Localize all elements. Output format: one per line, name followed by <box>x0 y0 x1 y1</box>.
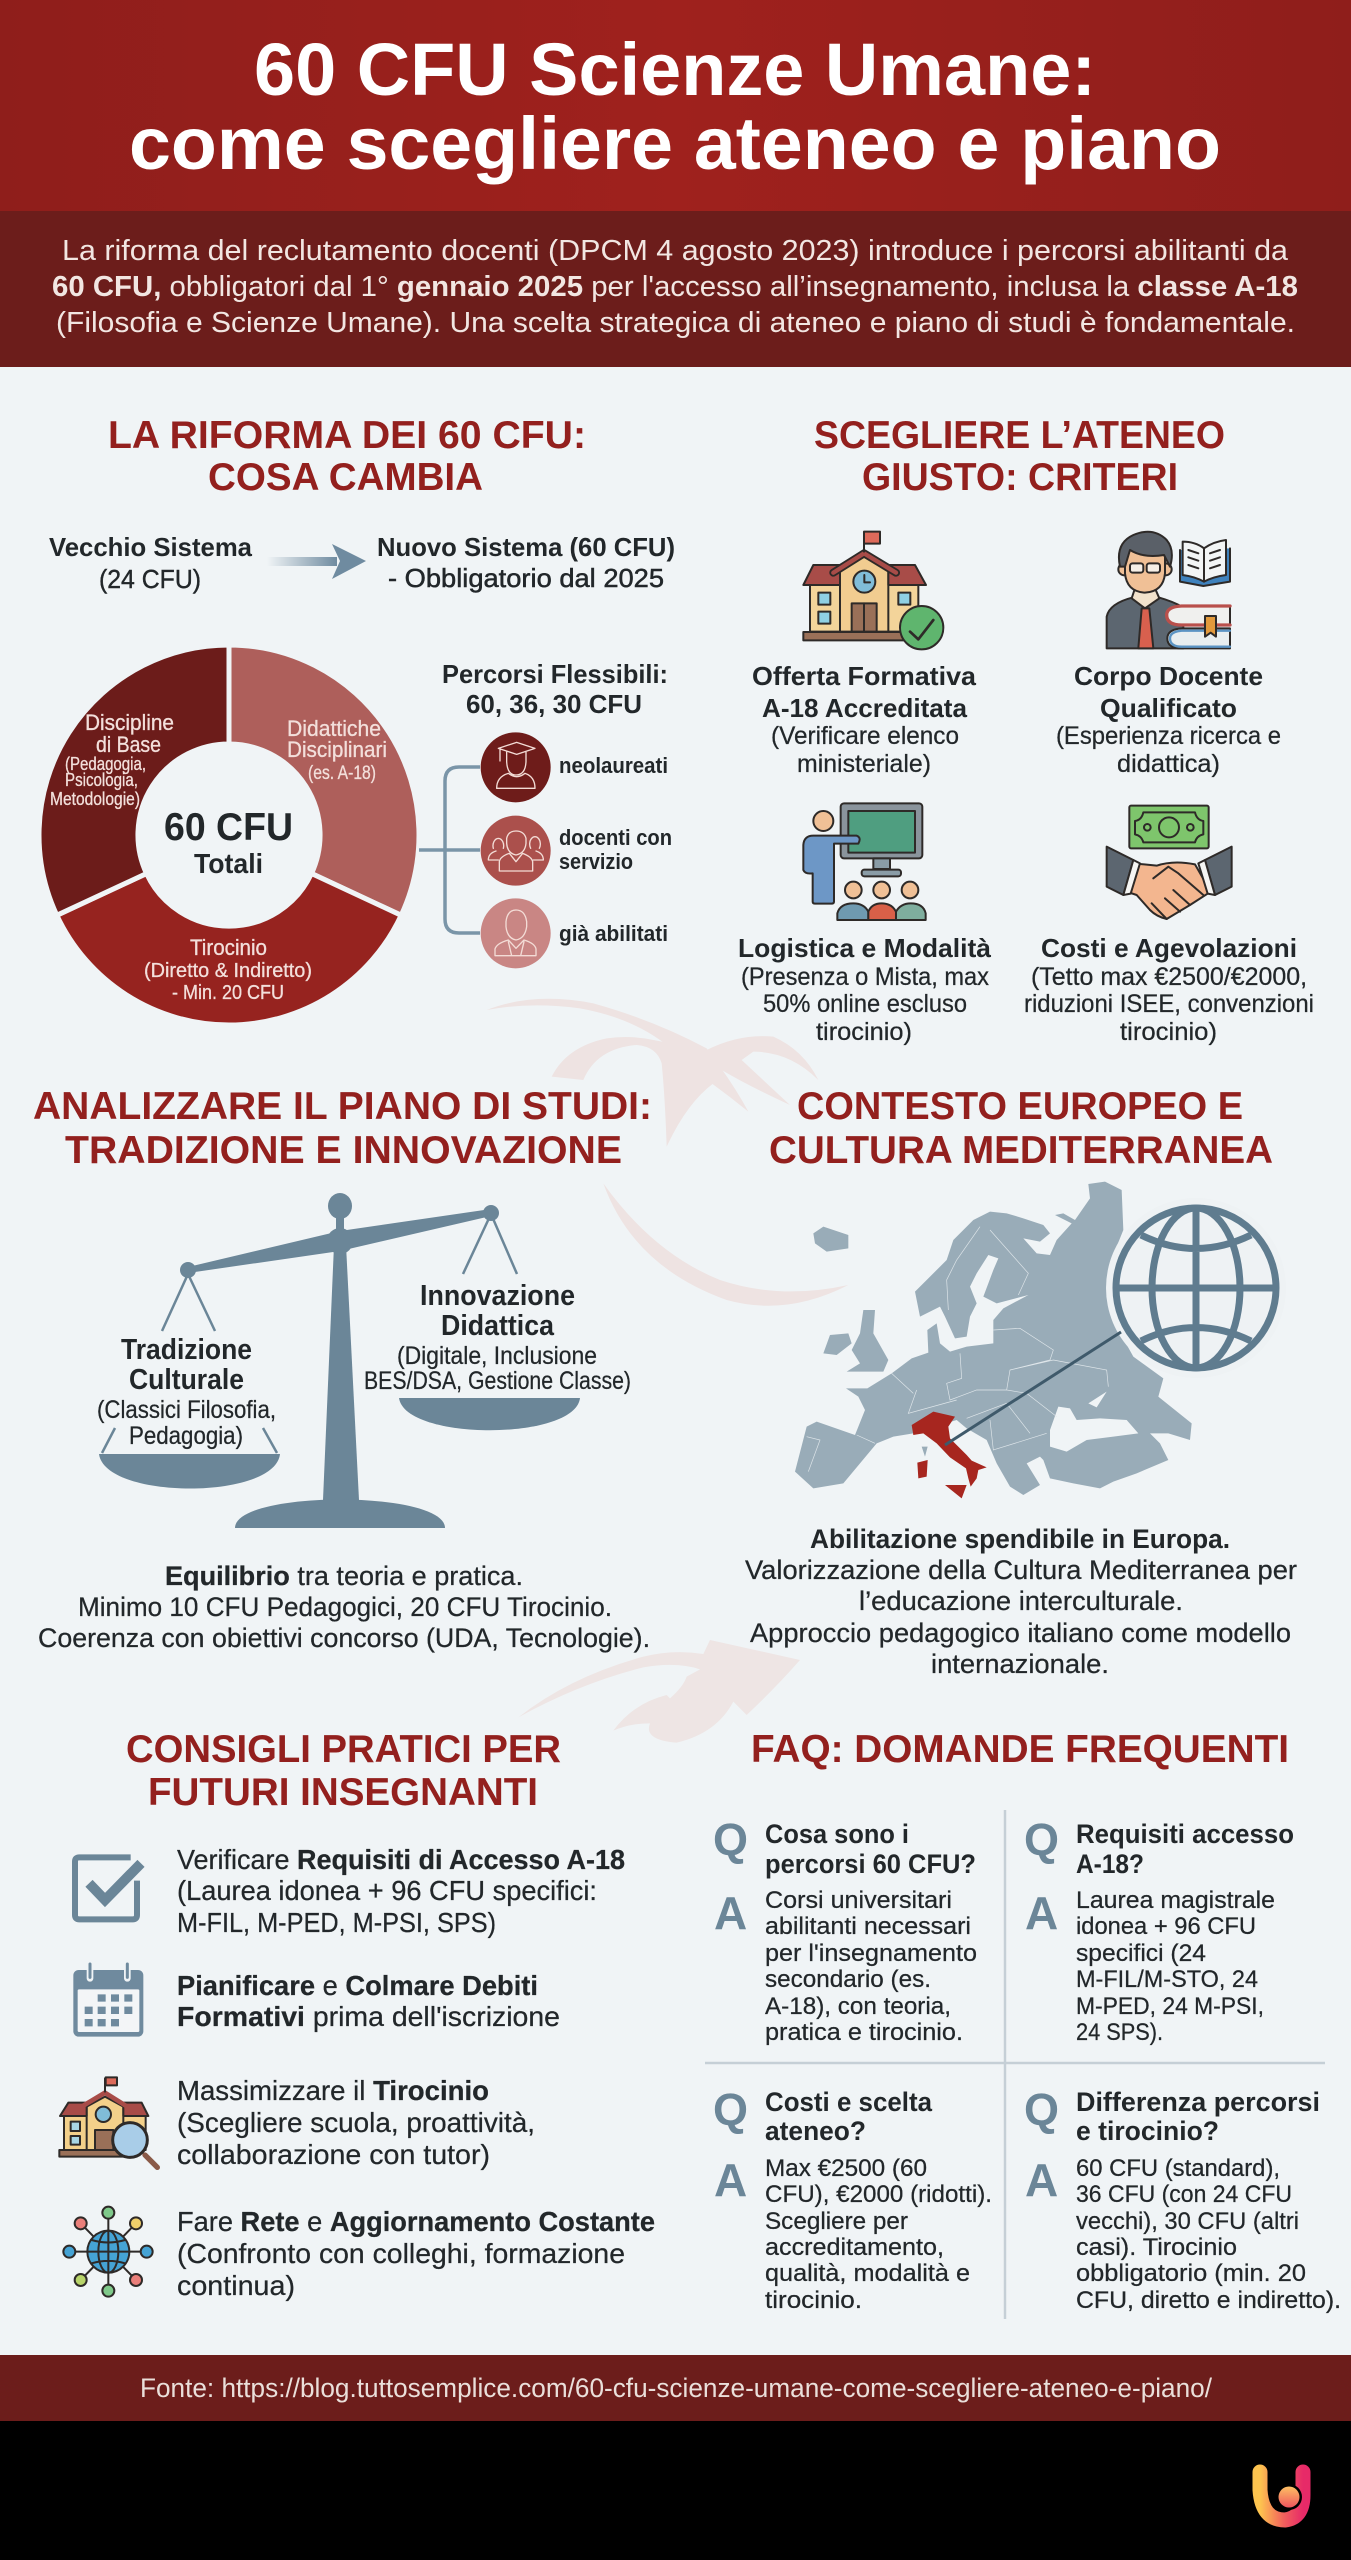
FAQ item 1: per l'insegnamento <box>765 1940 977 1967</box>
text: requisiti: (Laurea idonea + 96 CFU specifici: <box>177 1875 597 1906</box>
old system label: Vecchio Sistema <box>49 532 253 562</box>
FAQ item 2: A-18? <box>1076 1849 1144 1879</box>
text: costi <box>1024 933 1314 1046</box>
donut center label: Totali <box>194 848 263 879</box>
panel: piano di studi <box>33 1085 652 1653</box>
heading: consigli: FUTURI INSEGNANTI <box>148 1771 538 1814</box>
text: equilibrio: Minimo 10 CFU Pedagogici, 20 CFU Tirocinio. <box>78 1592 612 1622</box>
FAQ item 2: A <box>1025 1887 1058 1939</box>
label: innovazione didattica: Didattica <box>441 1310 555 1342</box>
text: tirocinio tip: (Scegliere scuola, proattività, <box>177 2107 535 2138</box>
text: costi: tirocinio) <box>1120 1018 1217 1046</box>
label: tradizione culturale: Tradizione <box>121 1334 252 1366</box>
text: equilibrio: Equilibrio tra teoria e pratica. <box>165 1561 523 1591</box>
FAQ item 3: Max €2500 (60 <box>765 2155 927 2182</box>
intro text: La riforma del reclutamento docenti (DPCM 4 agosto 2023) introduce i percorsi abilitanti da <box>62 235 1289 267</box>
Italy highlighted <box>912 1412 987 1498</box>
FAQ item 2: M-FIL/M-STO, 24 <box>1076 1966 1258 1993</box>
text: pianificare: Pianificare e Colmare Debiti <box>177 1970 538 2001</box>
decorative watermark: upper swirl <box>487 999 848 1306</box>
FAQ item 1: pratica e tirocinio. <box>765 2019 963 2046</box>
FAQ item 3: accreditamento, <box>765 2234 944 2261</box>
text: logistica: 50% online escluso <box>763 990 967 1018</box>
heading: riforma <box>108 414 586 499</box>
text: abilitazione: l’educazione interculturale. <box>859 1586 1183 1616</box>
label: innovazione didattica: BES/DSA, Gestione Classe) <box>364 1367 631 1395</box>
FAQ item 4 <box>1024 2084 1341 2314</box>
text: logistica: Logistica e Modalità <box>738 933 992 963</box>
heading: ateneo: GIUSTO: CRITERI <box>862 456 1178 499</box>
text: costi: riduzioni ISEE, convenzioni <box>1024 990 1314 1018</box>
text: corpo docente: Qualificato <box>1100 693 1237 723</box>
label: discipline di base: (Pedagogia, <box>65 754 146 774</box>
text: offerta formativa: ministeriale) <box>797 750 931 778</box>
label: didattiche disciplinari: Didattiche <box>287 716 381 741</box>
FAQ item 4: 60 CFU (standard), <box>1076 2155 1280 2182</box>
decorative watermark: lower swirl <box>518 1640 800 1743</box>
flexible paths heading: 60, 36, 30 CFU <box>466 689 642 719</box>
FAQ item 2 <box>1024 1814 1294 2046</box>
label: discipline di base: di Base <box>96 732 161 757</box>
new system label: - Obbligatorio dal 2025 <box>388 563 664 593</box>
text: corpo docente <box>1056 661 1281 778</box>
segment: tirocinio <box>57 874 401 1025</box>
FAQ item 3: CFU), €2000 (ridotti). <box>765 2181 992 2208</box>
icon: logo <box>1260 2472 1303 2520</box>
text: offerta formativa: A-18 Accreditata <box>762 693 968 723</box>
FAQ grid dividers <box>705 1810 1325 2319</box>
text: logistica: tirocinio) <box>816 1018 912 1046</box>
text: equilibrio: Coerenza con obiettivi concorso (UDA, Tecnologie). <box>38 1623 650 1653</box>
arrow old to new <box>267 544 366 579</box>
label: tradizione culturale <box>97 1334 276 1450</box>
text: offerta formativa: Offerta Formativa <box>752 661 977 691</box>
icon: school with magnifier <box>59 2077 157 2167</box>
FAQ item 4: casi). Tirocinio <box>1076 2234 1237 2261</box>
text: abilitazione <box>745 1524 1297 1679</box>
FAQ item 4: e tirocinio? <box>1076 2116 1219 2146</box>
icon: handshake and cash <box>1107 806 1232 919</box>
black bottom strip <box>0 2421 1351 2560</box>
FAQ item 4: obbligatorio (min. 20 <box>1076 2260 1306 2287</box>
text: requisiti: Verificare Requisiti di Accesso A-18 <box>177 1844 625 1875</box>
FAQ item 2: idonea + 96 CFU <box>1076 1913 1256 1940</box>
icon: globe <box>1106 1198 1286 1378</box>
intro text: 60 CFU, obbligatori dal 1° gennaio 2025 per l'accesso all’insegnamento, inclusa la classe A-18 <box>52 271 1298 303</box>
donut chart <box>39 645 419 1025</box>
label: tirocinio: Tirocinio <box>190 935 267 960</box>
FAQ item 2: 24 SPS). <box>1076 2019 1163 2046</box>
text: rete <box>177 2206 655 2301</box>
FAQ item 4: Q <box>1024 2084 1059 2135</box>
source footer <box>0 2355 1351 2421</box>
text: rete: Fare Rete e Aggiornamento Costante <box>177 2206 655 2237</box>
FAQ item 1: Cosa sono i <box>765 1819 909 1849</box>
label: didattiche disciplinari: (es. A-18) <box>308 763 376 784</box>
title: come scegliere ateneo e piano <box>129 102 1221 185</box>
heading: ateneo <box>814 414 1225 499</box>
text: abilitazione: internazionale. <box>931 1649 1109 1679</box>
label: innovazione didattica: Innovazione <box>420 1280 575 1312</box>
FAQ item 4: A <box>1025 2154 1058 2206</box>
FAQ item 1: A <box>714 1887 747 1939</box>
FAQ item 1: abilitanti necessari <box>765 1913 971 1940</box>
heading: consigli: CONSIGLI PRATICI PER <box>126 1728 561 1771</box>
intro text: (Filosofia e Scienze Umane). Una scelta strategica di ateneo e piano di studi è fondamentale. <box>56 307 1295 339</box>
FAQ item 4: Differenza percorsi <box>1076 2087 1320 2117</box>
segment: didattiche disciplinari <box>229 645 419 915</box>
FAQ item 2: Q <box>1024 1814 1059 1865</box>
heading: riforma: LA RIFORMA DEI 60 CFU: <box>108 414 586 457</box>
heading: FAQ: FAQ: DOMANDE FREQUENTI <box>751 1728 1289 1771</box>
label: tradizione culturale: (Classici Filosofia, <box>97 1396 276 1424</box>
heading: contesto <box>769 1085 1273 1172</box>
icon: teachers group <box>481 816 551 886</box>
FAQ item 3: Costi e scelta <box>765 2087 933 2117</box>
icon: classroom screen <box>803 803 926 920</box>
label: tradizione culturale: Culturale <box>129 1364 244 1396</box>
donut center label: 60 CFU <box>164 806 293 849</box>
FAQ item 3: Scegliere per <box>765 2208 908 2235</box>
header banner <box>0 0 1351 211</box>
label: discipline di base: Psicologia, <box>65 770 138 790</box>
FAQ item 3: tirocinio. <box>765 2287 862 2314</box>
segment: discipline di base <box>39 645 229 915</box>
panel: FAQ <box>705 1728 1341 2319</box>
panel: scegliere l'ateneo <box>738 414 1314 1046</box>
label: tirocinio <box>144 935 312 1004</box>
icon: accredited school <box>803 532 943 649</box>
pointer line globe to Italy <box>945 1332 1121 1445</box>
source footer: Fonte: https://blog.tuttosemplice.com/60-cfu-scienze-umane-come-scegliere-ateneo-e-piano/ <box>140 2373 1212 2403</box>
text: abilitazione: Abilitazione spendibile in Europa. <box>810 1524 1230 1554</box>
label: discipline di base <box>50 710 174 809</box>
new system label: Nuovo Sistema (60 CFU) <box>377 532 675 562</box>
donut center label <box>164 806 293 879</box>
heading: piano: TRADIZIONE E INNOVAZIONE <box>65 1129 622 1172</box>
icon: balance scale <box>99 1193 580 1528</box>
heading: piano: ANALIZZARE IL PIANO DI STUDI: <box>33 1085 652 1128</box>
title: 60 CFU Scienze Umane: <box>254 28 1096 111</box>
heading: contesto: CULTURA MEDITERRANEA <box>769 1129 1273 1172</box>
text: logistica <box>738 933 992 1046</box>
text: pianificare: Formativi prima dell'iscrizione <box>177 2001 560 2032</box>
text: costi: Costi e Agevolazioni <box>1041 933 1297 963</box>
text: abilitazione: Approccio pedagogico italiano come modello <box>750 1618 1291 1648</box>
FAQ item 1: A-18), con teoria, <box>765 1993 951 2020</box>
FAQ item 3: A <box>714 2154 747 2206</box>
FAQ item 1: percorsi 60 CFU? <box>765 1849 976 1879</box>
FAQ item 2: M-PED, 24 M-PSI, <box>1076 1993 1264 2020</box>
icon: qualified teacher <box>481 898 551 968</box>
text: costi: (Tetto max €2500/€2000, <box>1031 963 1307 991</box>
icon: checkbox <box>75 1857 141 1919</box>
text: pianificare <box>177 1970 560 2032</box>
heading: ateneo: SCEGLIERE L’ATENEO <box>814 414 1225 457</box>
text: rete: continua) <box>177 2270 295 2301</box>
connector tree <box>419 767 480 933</box>
FAQ item 2: Laurea magistrale <box>1076 1887 1275 1914</box>
FAQ item 1 <box>713 1814 977 2046</box>
text: tirocinio tip: Massimizzare il Tirocinio <box>177 2075 489 2106</box>
label: innovazione didattica: (Digitale, Inclusione <box>397 1342 597 1370</box>
icon: teacher with books <box>1107 532 1230 648</box>
intro text <box>52 235 1298 339</box>
text: corpo docente: (Esperienza ricerca e <box>1056 722 1281 750</box>
text: corpo docente: didattica) <box>1117 750 1220 778</box>
heading: piano <box>33 1085 652 1172</box>
text: offerta formativa <box>752 661 977 778</box>
icon: network globe <box>63 2207 153 2297</box>
old system label: (24 CFU) <box>99 564 201 594</box>
heading: riforma: COSA CAMBIA <box>208 456 483 499</box>
FAQ item 2: specifici (24 <box>1076 1940 1206 1967</box>
FAQ item 4: vecchi), 30 CFU (altri <box>1076 2208 1299 2235</box>
label: discipline di base: Discipline <box>85 710 174 735</box>
FAQ item 1: Q <box>713 1814 748 1865</box>
labels: paths: già abilitati <box>559 921 668 946</box>
title <box>129 28 1221 185</box>
intro band <box>0 211 1351 367</box>
text: requisiti <box>177 1844 625 1938</box>
FAQ item 3: qualità, modalità e <box>765 2260 970 2287</box>
FAQ item 3: Q <box>713 2084 748 2135</box>
label: innovazione didattica <box>364 1280 631 1395</box>
old system label <box>49 532 253 594</box>
label: tirocinio: - Min. 20 CFU <box>172 982 284 1004</box>
panel: la riforma dei 60 CFU <box>39 414 675 1025</box>
FAQ item 1: Corsi universitari <box>765 1887 952 1914</box>
text: tirocinio tip <box>177 2075 535 2170</box>
labels: paths: servizio <box>559 849 633 874</box>
icon: graduate <box>481 732 551 802</box>
map of Europe <box>795 1182 1192 1498</box>
text: tirocinio tip: collaborazione con tutor) <box>177 2139 490 2170</box>
label: tradizione culturale: Pedagogia) <box>129 1422 243 1450</box>
FAQ item 2: Requisiti accesso <box>1076 1819 1294 1849</box>
FAQ item 4: CFU, diretto e indiretto). <box>1076 2287 1341 2314</box>
text: abilitazione: Valorizzazione della Cultura Mediterranea per <box>745 1555 1297 1585</box>
new system label <box>377 532 675 593</box>
text: requisiti: M-FIL, M-PED, M-PSI, SPS) <box>177 1907 496 1938</box>
text: corpo docente: Corpo Docente <box>1074 661 1263 691</box>
flexible paths heading <box>442 659 668 719</box>
label: didattiche disciplinari: Disciplinari <box>287 737 387 762</box>
text: rete: (Confronto con colleghi, formazione <box>177 2238 625 2269</box>
FAQ item 3 <box>713 2084 992 2314</box>
labels: paths <box>559 753 672 946</box>
label: tirocinio: (Diretto & Indiretto) <box>144 960 312 982</box>
panel: consigli pratici <box>59 1728 655 2301</box>
FAQ item 1: secondario (es. <box>765 1966 931 1993</box>
icon: calendar <box>73 1963 143 2037</box>
FAQ item 4: 36 CFU (con 24 CFU <box>1076 2181 1292 2208</box>
heading: contesto: CONTESTO EUROPEO E <box>797 1085 1243 1128</box>
panel: contesto europeo <box>745 1085 1297 1679</box>
text: offerta formativa: (Verificare elenco <box>771 722 959 750</box>
labels: paths: neolaureati <box>559 753 668 778</box>
flexible paths heading: Percorsi Flessibili: <box>442 659 668 689</box>
label: didattiche disciplinari <box>287 716 387 784</box>
FAQ item 3: ateneo? <box>765 2116 866 2146</box>
label: discipline di base: Metodologie) <box>50 789 140 809</box>
labels: paths: docenti con <box>559 825 672 850</box>
heading: consigli <box>126 1728 561 1814</box>
text: equilibrio <box>38 1561 650 1653</box>
text: logistica: (Presenza o Mista, max <box>741 963 989 991</box>
